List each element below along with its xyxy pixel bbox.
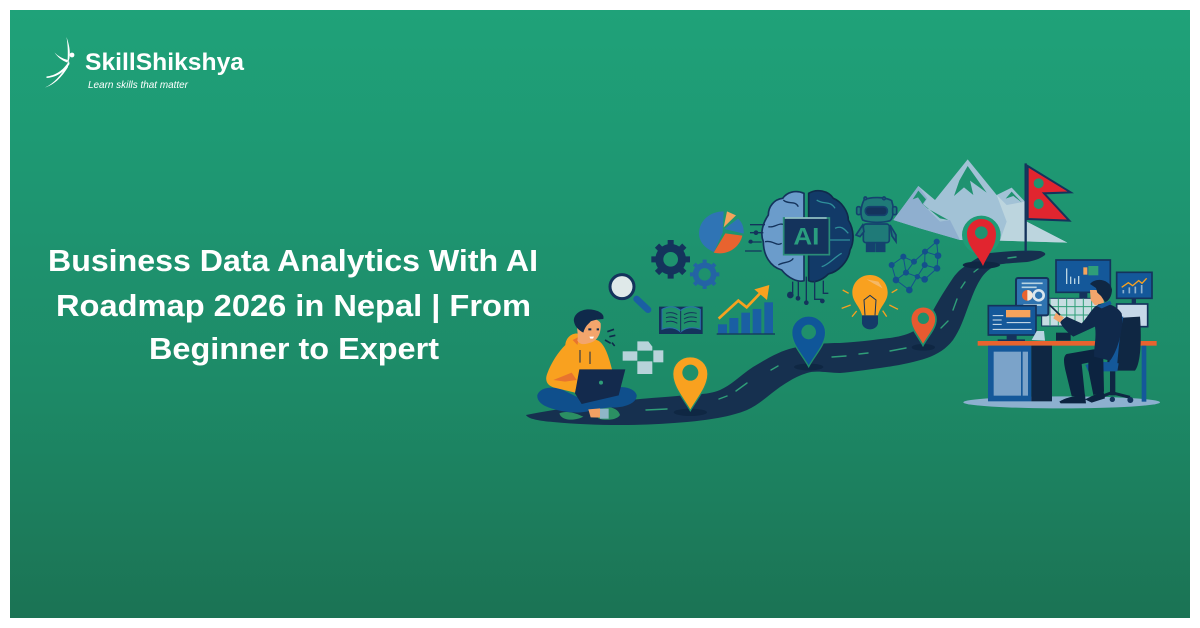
legs: [1064, 349, 1104, 396]
desk scene: [963, 260, 1160, 408]
title: Beginner to Expert: [149, 331, 439, 366]
logo: [45, 37, 245, 91]
collar: [1097, 301, 1112, 308]
front monitor: [988, 306, 1036, 341]
hair: [1090, 280, 1112, 302]
shoes: [559, 407, 620, 420]
tagline: Learn skills that matter: [88, 79, 188, 91]
hoodie: [546, 334, 612, 393]
desk items: [1032, 331, 1045, 341]
tablet screen: [1016, 278, 1048, 315]
flag pole: [1022, 163, 1029, 252]
title: Business Data Analytics With AI: [48, 243, 538, 278]
road: [526, 251, 1045, 425]
desk top: [978, 341, 1157, 346]
desk drawers: [988, 346, 1052, 401]
left lobe: [762, 192, 804, 281]
laptop: [575, 369, 625, 404]
neck and face: [577, 318, 601, 344]
person with laptop: [537, 309, 637, 420]
large gear: [651, 240, 690, 279]
orange-red map pin: [911, 307, 936, 351]
floor ellipse: [963, 396, 1160, 408]
magnifying glass: [610, 275, 648, 310]
shoe on foot: [600, 409, 609, 419]
chip label: AI: [793, 224, 819, 251]
road centre dashes: [646, 257, 1016, 410]
lower right white monitor: [1117, 304, 1148, 327]
hood strings: [580, 350, 590, 364]
red map pin: [962, 216, 1001, 269]
puzzle pieces: [623, 341, 663, 374]
hand and pen: [1053, 313, 1064, 323]
shoes: [1059, 391, 1105, 403]
title: Roadmap 2026 in Nepal | From: [56, 288, 531, 323]
torso and arm: [1060, 304, 1122, 361]
face: [1090, 290, 1104, 305]
right illustration group: [842, 159, 1160, 408]
brain folds: [765, 200, 798, 265]
left illustration group: [537, 191, 853, 420]
right monitor with line chart: [1117, 272, 1152, 305]
mountains: [893, 159, 1067, 243]
title: [48, 243, 538, 366]
mouth: [589, 337, 594, 339]
orange map pin: [673, 357, 708, 416]
small gear: [690, 260, 719, 289]
robot: [856, 197, 897, 251]
foot: [588, 408, 601, 418]
icon: leaping figure: [45, 37, 74, 88]
AI chip: [784, 218, 829, 255]
seated man: [1049, 280, 1122, 403]
right lobe: [809, 191, 853, 282]
hoodie shadow: [553, 337, 579, 382]
light bulb: [842, 275, 898, 329]
pie chart: [699, 211, 744, 253]
open book: [659, 307, 703, 334]
brand name: SkillShikshya: [85, 49, 245, 76]
blue map pin: [792, 316, 826, 370]
circuit lines bottom: [793, 277, 828, 302]
hair: [574, 309, 604, 333]
AI brain: [745, 191, 853, 305]
neural network: [889, 239, 941, 293]
bar chart with rising arrow: [717, 285, 775, 334]
facial features: [588, 328, 599, 330]
chair: [1085, 317, 1141, 403]
Nepal flag: [1028, 166, 1071, 221]
circuit lines left: [745, 225, 765, 251]
desk leg: [1142, 346, 1146, 402]
large top monitor: [1056, 260, 1110, 298]
grid screen: [1042, 298, 1098, 326]
legs: [537, 387, 637, 412]
speech marks: [605, 329, 615, 346]
